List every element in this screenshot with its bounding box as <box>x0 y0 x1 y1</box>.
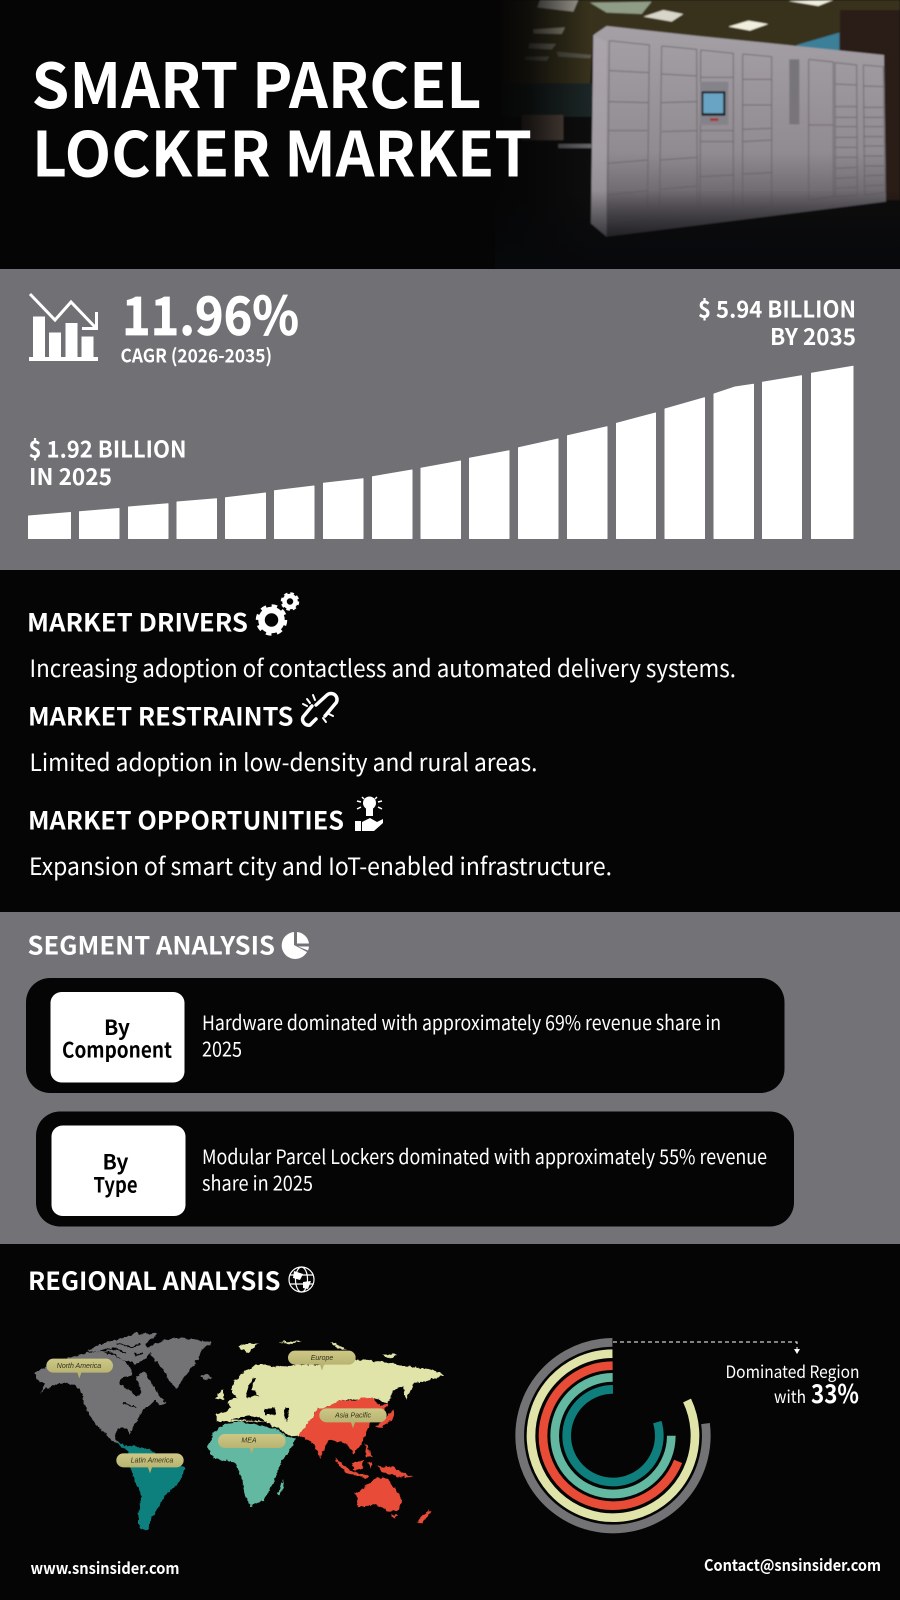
CAGR value: 11.96% <box>122 275 299 351</box>
region: mea <box>207 1422 296 1507</box>
label: by type: By <box>103 1146 128 1176</box>
heading: market drivers: MARKET DRIVERS <box>27 604 248 640</box>
value 2025: $ 1.92 BILLION <box>28 430 186 464</box>
label: asia pacific <box>319 1408 387 1428</box>
footer: contact: Contact@snsinsider.com <box>704 1552 881 1576</box>
region: north america <box>35 1333 212 1444</box>
label: by component <box>50 992 184 1082</box>
dashed leader arrow <box>613 1342 800 1354</box>
heading: segment analysis: SEGMENT ANALYSIS <box>28 926 275 962</box>
islands: arctic <box>239 1341 398 1358</box>
callout: dominated region <box>726 1358 860 1411</box>
label: by type: Type <box>94 1170 138 1200</box>
label: europe <box>288 1351 356 1371</box>
text: component <box>202 1007 721 1062</box>
text: type: share in 2025 <box>202 1168 313 1196</box>
header panel <box>0 0 900 269</box>
value 2035: BY 2035 <box>770 318 856 352</box>
value 2025 <box>28 430 186 492</box>
label: by component: By <box>104 1012 130 1042</box>
panel: market size <box>0 269 900 570</box>
region: europe <box>217 1359 444 1436</box>
card: by type <box>36 1112 794 1226</box>
icon: globe <box>289 1267 314 1292</box>
icon: hand with bulb <box>355 796 383 831</box>
text: driver: Increasing adoption of contactless and automated delivery systems. <box>30 649 736 684</box>
icon: pie chart <box>282 932 309 959</box>
label: north america <box>46 1359 113 1379</box>
heading: market opportunities: MARKET OPPORTUNITIES <box>28 802 344 838</box>
panel: segment analysis <box>0 912 900 1244</box>
callout: dominated region: Dominated Region <box>726 1358 860 1383</box>
text: type: Modular Parcel Lockers dominated with approximately 55% revenue <box>202 1141 767 1170</box>
text: type <box>202 1141 767 1196</box>
text: opportunity: Expansion of smart city and IoT-enabled infrastructure. <box>29 847 612 882</box>
value 2025: IN 2025 <box>29 458 112 492</box>
region: latin america <box>115 1441 185 1531</box>
radial chart <box>504 1326 722 1545</box>
text: component: 2025 <box>202 1034 242 1062</box>
label: latin america: Latin America <box>131 1458 173 1465</box>
bar chart <box>28 366 853 538</box>
label: asia pacific: Asia Pacific <box>334 1413 372 1420</box>
callout: dominated region: 33% <box>811 1374 859 1411</box>
icon: chart with arrow <box>29 294 98 361</box>
seas: europe <box>230 1377 289 1421</box>
value 2035 <box>698 290 856 352</box>
footer: website: www.snsinsider.com <box>30 1555 180 1579</box>
label: mea: MEA <box>241 1438 257 1445</box>
region: asia pacific <box>298 1397 431 1524</box>
photo fade left <box>495 0 590 269</box>
icon: gears <box>258 594 298 634</box>
text: component: Hardware dominated with approximately 69% revenue share in <box>202 1007 721 1036</box>
panel: market dynamics <box>0 570 900 912</box>
icon: broken chain <box>303 693 337 725</box>
title: LOCKER MARKET <box>32 104 532 194</box>
CAGR label: CAGR (2026-2035) <box>120 342 272 368</box>
label: by type <box>52 1126 186 1216</box>
cracks: arctic islands <box>100 1343 143 1408</box>
text: restraint: Limited adoption in low-density and rural areas. <box>30 743 538 778</box>
value 2035: $ 5.94 BILLION <box>698 290 856 324</box>
continents <box>35 1333 444 1531</box>
locker photo <box>500 0 900 269</box>
heading: regional analysis: REGIONAL ANALYSIS <box>28 1262 280 1298</box>
label: latin america <box>116 1453 184 1473</box>
card: by component <box>26 978 784 1093</box>
label: mea <box>218 1434 286 1454</box>
photo fade bottom <box>495 190 900 269</box>
label: europe: Europe <box>311 1355 333 1362</box>
title: SMART PARCEL <box>32 36 482 126</box>
title <box>32 36 532 194</box>
panel: regional analysis <box>0 1244 900 1600</box>
heading: market restraints: MARKET RESTRAINTS <box>28 698 294 734</box>
world map <box>35 1333 444 1531</box>
island: british isles <box>216 1388 224 1400</box>
label: north america: North America <box>57 1363 101 1370</box>
label: by component: Component <box>62 1034 172 1064</box>
callout: dominated region: with <box>774 1383 806 1408</box>
